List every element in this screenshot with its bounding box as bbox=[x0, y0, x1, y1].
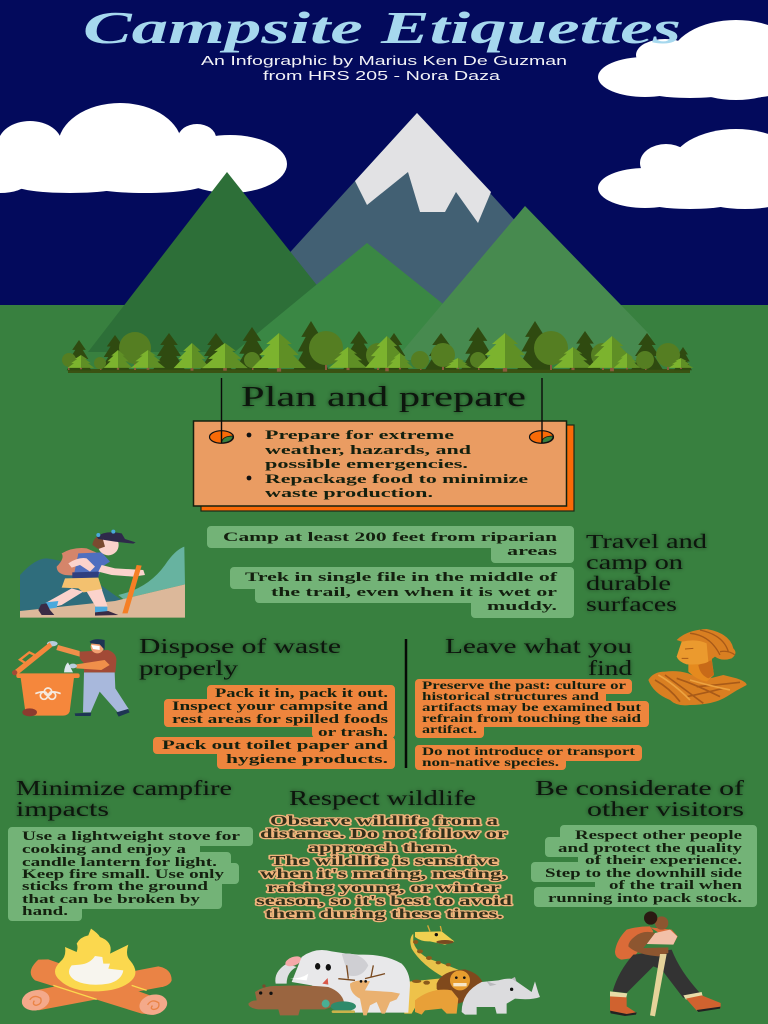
heading: Travel and camp on durable surfaces: Travel and bbox=[586, 531, 707, 553]
callout: campfire advice: that can be broken by bbox=[22, 891, 201, 906]
icon: group of wild animals bbox=[248, 925, 540, 1015]
callout: pack it in: or trash. bbox=[318, 724, 388, 739]
callout: preserve the past bbox=[419, 678, 645, 736]
callout: non-native species: non-native species. bbox=[422, 755, 559, 769]
heading: Be considerate of other visitors: other visitors bbox=[587, 797, 744, 821]
callout: pack it in: rest areas for spilled foods bbox=[172, 711, 388, 726]
icon: left pin bbox=[210, 431, 234, 443]
heading: Leave what you find: find bbox=[588, 656, 633, 680]
panel: plan and prepare: possible emergencies. bbox=[265, 456, 468, 471]
panel: plan and prepare bbox=[194, 378, 574, 511]
turtle bbox=[322, 1000, 356, 1013]
callout: pack it in: Pack it in, pack it out. bbox=[215, 685, 388, 700]
hippo bbox=[248, 984, 344, 1015]
callout: pack it in bbox=[168, 685, 391, 739]
callout: other visitors advice bbox=[535, 827, 753, 905]
callout: preserve the past: historical structures and bbox=[422, 689, 599, 703]
callout: other visitors advice: running into pack stock. bbox=[548, 890, 742, 905]
subtitle bbox=[201, 54, 567, 83]
background: green ground bbox=[0, 305, 768, 1024]
callout: non-native species bbox=[419, 744, 638, 769]
callout: preserve the past: artifacts may be examined but bbox=[422, 700, 641, 714]
heading: Be considerate of other visitors bbox=[535, 776, 744, 821]
icon: bust statue bbox=[648, 629, 747, 705]
heading: Travel and camp on durable surfaces bbox=[586, 531, 707, 616]
callout: non-native species: Do not introduce or transport bbox=[422, 744, 635, 758]
mountain: left dark green bbox=[88, 172, 370, 352]
callout: other visitors advice: and protect the quality bbox=[558, 840, 743, 855]
icon: right pin bbox=[530, 431, 554, 443]
callout: campfire advice bbox=[12, 828, 249, 918]
giraffe bbox=[404, 925, 463, 1014]
subtitle: An Infographic by Marius Ken De Guzman bbox=[201, 54, 567, 68]
callout: riparian distance: areas bbox=[507, 543, 557, 558]
background: night sky bbox=[0, 0, 768, 306]
text block: wildlife advice: raising young, or winter bbox=[267, 881, 500, 896]
text block: wildlife advice: them during these times. bbox=[265, 907, 503, 922]
callout: campfire advice: candle lantern for light. bbox=[22, 854, 217, 869]
panel: plan and prepare: Repackage food to minimize bbox=[265, 471, 528, 486]
callout: riparian distance: Camp at least 200 feet from riparian bbox=[223, 529, 558, 544]
icon: person at waste bin bbox=[12, 639, 130, 717]
cloud: left bbox=[0, 103, 287, 193]
callout: other visitors advice: of their experience. bbox=[585, 852, 742, 867]
callout: campfire advice: cooking and enjoy a bbox=[22, 841, 187, 856]
callout: campfire advice: sticks from the ground bbox=[22, 878, 209, 893]
text block: wildlife advice: Observe wildlife from a bbox=[270, 814, 498, 829]
callout: toilet paper: Pack out toilet paper and bbox=[162, 737, 389, 752]
text block: wildlife advice: The wildlife is sensitive bbox=[270, 854, 498, 869]
callout: toilet paper bbox=[157, 737, 391, 766]
heading: Be considerate of other visitors: Be considerate of bbox=[535, 776, 744, 800]
callout: other visitors advice: Respect other people bbox=[575, 827, 742, 842]
icon: biohazard bbox=[35, 688, 61, 699]
callout: single file bbox=[234, 569, 570, 614]
rhino bbox=[462, 977, 540, 1015]
panel: plan and prepare: waste production. bbox=[265, 485, 433, 500]
panel: plan and prepare: weather, hazards, and bbox=[265, 442, 472, 457]
icon: hiker on trail bbox=[20, 530, 185, 618]
cloud: top right bbox=[598, 20, 768, 100]
title: Campsite Etiquettes bbox=[83, 3, 681, 53]
icon: woman hiker bbox=[610, 911, 721, 1016]
lion bbox=[415, 969, 484, 1015]
callout: single file: the trail, even when it is wet or bbox=[271, 584, 557, 599]
callout: campfire advice: Keep fire small. Use only bbox=[22, 866, 225, 881]
panel: plan and prepare: Prepare for extreme bbox=[265, 427, 454, 442]
heading: Dispose of waste properly: Dispose of waste bbox=[139, 634, 341, 658]
elephant bbox=[275, 950, 410, 1013]
callout: other visitors advice: of the trail when bbox=[609, 877, 743, 892]
heading: Leave what you find: Leave what you bbox=[445, 634, 633, 658]
mountain: right green bbox=[395, 206, 655, 360]
callout: single file: muddy. bbox=[487, 598, 557, 613]
heading: Minimize campfire impacts bbox=[16, 776, 232, 821]
callout: riparian distance bbox=[211, 529, 570, 559]
text block: wildlife advice: approach them. bbox=[308, 841, 456, 856]
heading: Minimize campfire impacts: impacts bbox=[16, 797, 109, 821]
callout: preserve the past: artifact. bbox=[422, 722, 477, 736]
callout: other visitors advice: Step to the downhill side bbox=[545, 865, 742, 880]
heading: Travel and camp on durable surfaces: surfaces bbox=[586, 594, 677, 616]
text block: wildlife advice: distance. Do not follow or bbox=[260, 827, 507, 842]
callout: preserve the past: refrain from touching the said bbox=[422, 711, 641, 725]
tree line bbox=[62, 321, 693, 373]
heading: Leave what you find bbox=[445, 634, 633, 680]
heading: Travel and camp on durable surfaces: camp on bbox=[586, 552, 683, 574]
callout: toilet paper: hygiene products. bbox=[226, 751, 388, 766]
callout: single file: Trek in single file in the middle of bbox=[245, 569, 558, 584]
heading: Plan and prepare: Plan and prepare bbox=[241, 382, 526, 413]
callout: campfire advice: Use a lightweight stove for bbox=[22, 828, 240, 843]
mountain: middle green bbox=[225, 243, 490, 360]
cloud: lower right bbox=[598, 129, 768, 209]
callout: campfire advice: hand. bbox=[22, 903, 68, 918]
text block: wildlife advice: when it's mating, nesting, bbox=[260, 867, 507, 882]
subtitle: from HRS 205 - Nora Daza bbox=[263, 69, 500, 83]
deer bbox=[338, 965, 400, 1015]
mountain: centre snow-capped peak bbox=[242, 113, 592, 340]
callout: pack it in: Inspect your campsite and bbox=[172, 698, 389, 713]
heading: Travel and camp on durable surfaces: durable bbox=[586, 573, 671, 595]
icon: campfire bbox=[20, 929, 172, 1017]
heading: Dispose of waste properly bbox=[139, 634, 341, 680]
callout: preserve the past: Preserve the past: culture or bbox=[422, 678, 627, 692]
heading: Respect wildlife: Respect wildlife bbox=[289, 786, 476, 810]
text block: wildlife advice bbox=[256, 814, 512, 922]
text block: wildlife advice: season, so it's best to avoid bbox=[256, 894, 512, 909]
heading: Dispose of waste properly: properly bbox=[139, 656, 239, 680]
heading: Minimize campfire impacts: Minimize campfire bbox=[16, 776, 232, 800]
